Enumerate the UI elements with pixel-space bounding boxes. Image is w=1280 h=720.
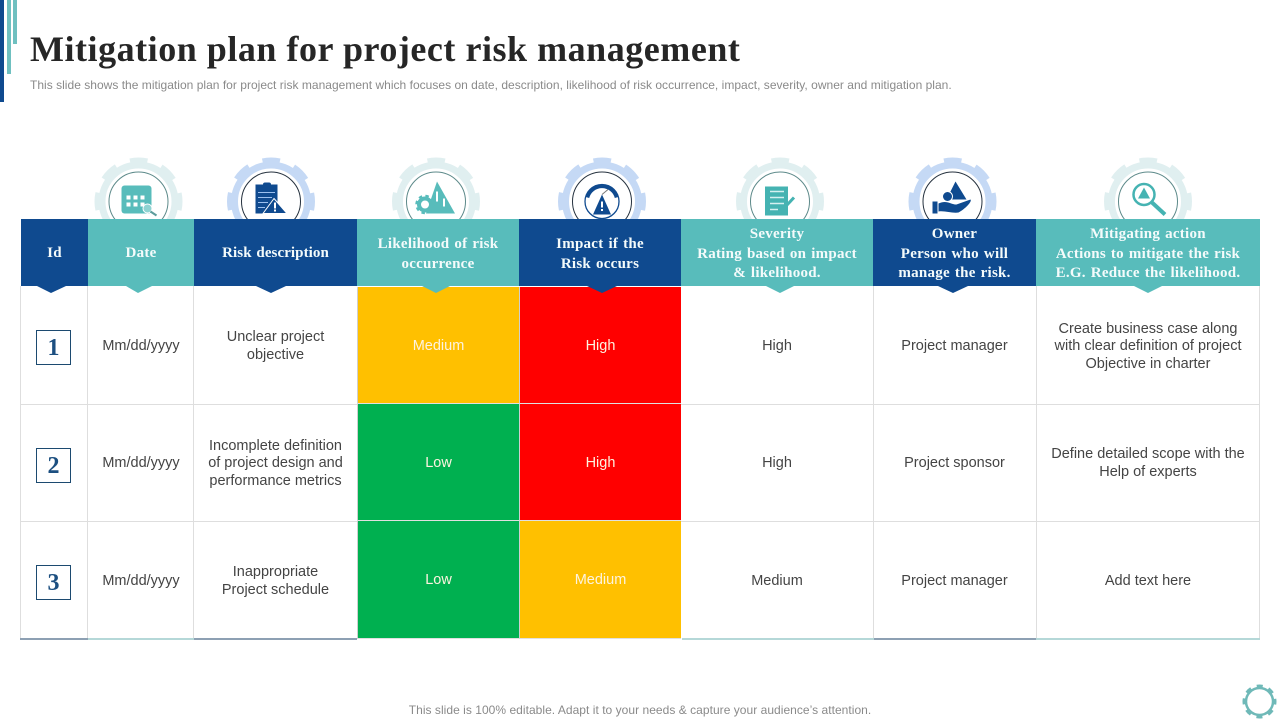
row 2 id: 2 <box>48 453 60 479</box>
header: severity: Rating based on impact <box>697 246 857 262</box>
row 3 id: 3 <box>48 570 60 596</box>
row 3 mitigating action: Add text here <box>1105 573 1191 589</box>
header: mitigating action: E.G. Reduce the likelihood. <box>1056 265 1240 281</box>
header pointers <box>37 286 1162 293</box>
row 1 mitigating action: Objective in charter <box>1086 356 1210 372</box>
row 1 mitigating action: Create business case along <box>1059 321 1237 337</box>
header: likelihood: Likelihood of risk <box>378 236 498 252</box>
row 3 risk description: Project schedule <box>222 582 329 598</box>
row 1 mitigating action <box>1054 321 1242 372</box>
row 1 risk description <box>227 329 324 363</box>
row 2 risk description <box>208 438 343 489</box>
coloured cell: row 1 impact: High <box>586 338 615 354</box>
row 2 risk description: of project design and <box>208 455 343 471</box>
header: likelihood <box>357 219 519 286</box>
header: date <box>88 219 194 286</box>
row 2 risk description: performance metrics <box>209 473 342 489</box>
coloured cell: row 1 likelihood: Medium <box>413 338 464 354</box>
header: date: Date <box>126 245 156 261</box>
header: owner: Person who will <box>901 246 1008 262</box>
table grid lines <box>20 286 1260 640</box>
header: owner: manage the risk. <box>898 265 1011 281</box>
header: risk description <box>194 219 357 286</box>
coloured cell: row 2 impact <box>519 404 681 521</box>
icon: warning and cog gear <box>396 162 476 242</box>
header: impact: Impact if the <box>556 236 644 252</box>
header: id: Id <box>47 245 62 261</box>
row 3 owner: Project manager <box>901 573 1008 589</box>
subtitle: This slide shows the mitigation plan for project risk management which focuses on date, description, likelihood of risk occurrence, impact, severity, owner and mitigation plan. <box>30 78 952 92</box>
row 3 id <box>36 565 71 600</box>
coloured cell: row 3 impact: Medium <box>575 572 626 588</box>
icon: gauge gear <box>562 162 642 242</box>
row 1 mitigating action: with clear definition of project <box>1054 338 1242 354</box>
icon: risk clipboard gear <box>231 162 311 242</box>
coloured cell: row 3 likelihood <box>357 521 519 639</box>
row 1 owner: Project manager <box>901 338 1008 354</box>
header: impact: Risk occurs <box>561 256 639 272</box>
icon: calendar gear <box>98 162 178 242</box>
row 2 id <box>36 448 71 483</box>
row 1 id: 1 <box>48 335 60 361</box>
header: severity: Severity <box>750 226 804 242</box>
row 2 mitigating action: Define detailed scope with the <box>1051 446 1245 462</box>
row 3 severity: Medium <box>751 573 803 589</box>
header: impact <box>519 219 681 286</box>
row 1 date: Mm/dd/yyyy <box>102 338 180 354</box>
coloured cell: row 3 impact <box>519 521 681 639</box>
accent bars <box>0 0 17 102</box>
row 2 owner: Project sponsor <box>904 455 1005 471</box>
row 1 risk description: objective <box>247 347 304 363</box>
header: mitigating action <box>1036 219 1260 286</box>
row 3 risk description <box>222 564 329 598</box>
icon: checklist gear <box>740 162 820 242</box>
gear icons row <box>94 158 1192 219</box>
title: Mitigation plan for project risk management <box>30 29 740 69</box>
header: mitigating action: Mitigating action <box>1090 226 1206 242</box>
row 1 id <box>36 330 71 365</box>
coloured cell: row 3 likelihood: Low <box>425 572 452 588</box>
coloured cell: row 1 likelihood <box>357 287 519 404</box>
header: severity <box>681 219 873 286</box>
footer note: This slide is 100% editable. Adapt it to your needs & capture your audience’s attention. <box>409 703 871 717</box>
row 1 risk description: Unclear project <box>227 329 324 345</box>
coloured cell: row 2 likelihood: Low <box>425 455 452 471</box>
row 2 severity: High <box>762 455 792 471</box>
row 3 date: Mm/dd/yyyy <box>102 573 180 589</box>
icon: magnifier gear <box>1108 162 1188 242</box>
coloured cell: row 2 impact: High <box>586 455 615 471</box>
icon: footer gear <box>1242 684 1276 718</box>
header: owner <box>873 219 1036 286</box>
header: severity: & likelihood. <box>733 265 821 281</box>
header: risk description: Risk description <box>222 245 329 261</box>
coloured cell: row 1 impact <box>519 287 681 404</box>
row 2 risk description: Incomplete definition <box>209 438 342 454</box>
row 2 date: Mm/dd/yyyy <box>102 455 180 471</box>
coloured cell: row 2 likelihood <box>357 404 519 521</box>
row 2 mitigating action: Help of experts <box>1099 464 1197 480</box>
icon: hand holding risk gear <box>912 162 992 242</box>
row 1 severity: High <box>762 338 792 354</box>
header: likelihood: occurrence <box>401 256 474 272</box>
header: owner: Owner <box>932 226 977 242</box>
row 3 risk description: Inappropriate <box>233 564 318 580</box>
header: id <box>21 219 88 286</box>
row 2 mitigating action <box>1051 446 1245 480</box>
header: mitigating action: Actions to mitigate the risk <box>1056 246 1240 262</box>
